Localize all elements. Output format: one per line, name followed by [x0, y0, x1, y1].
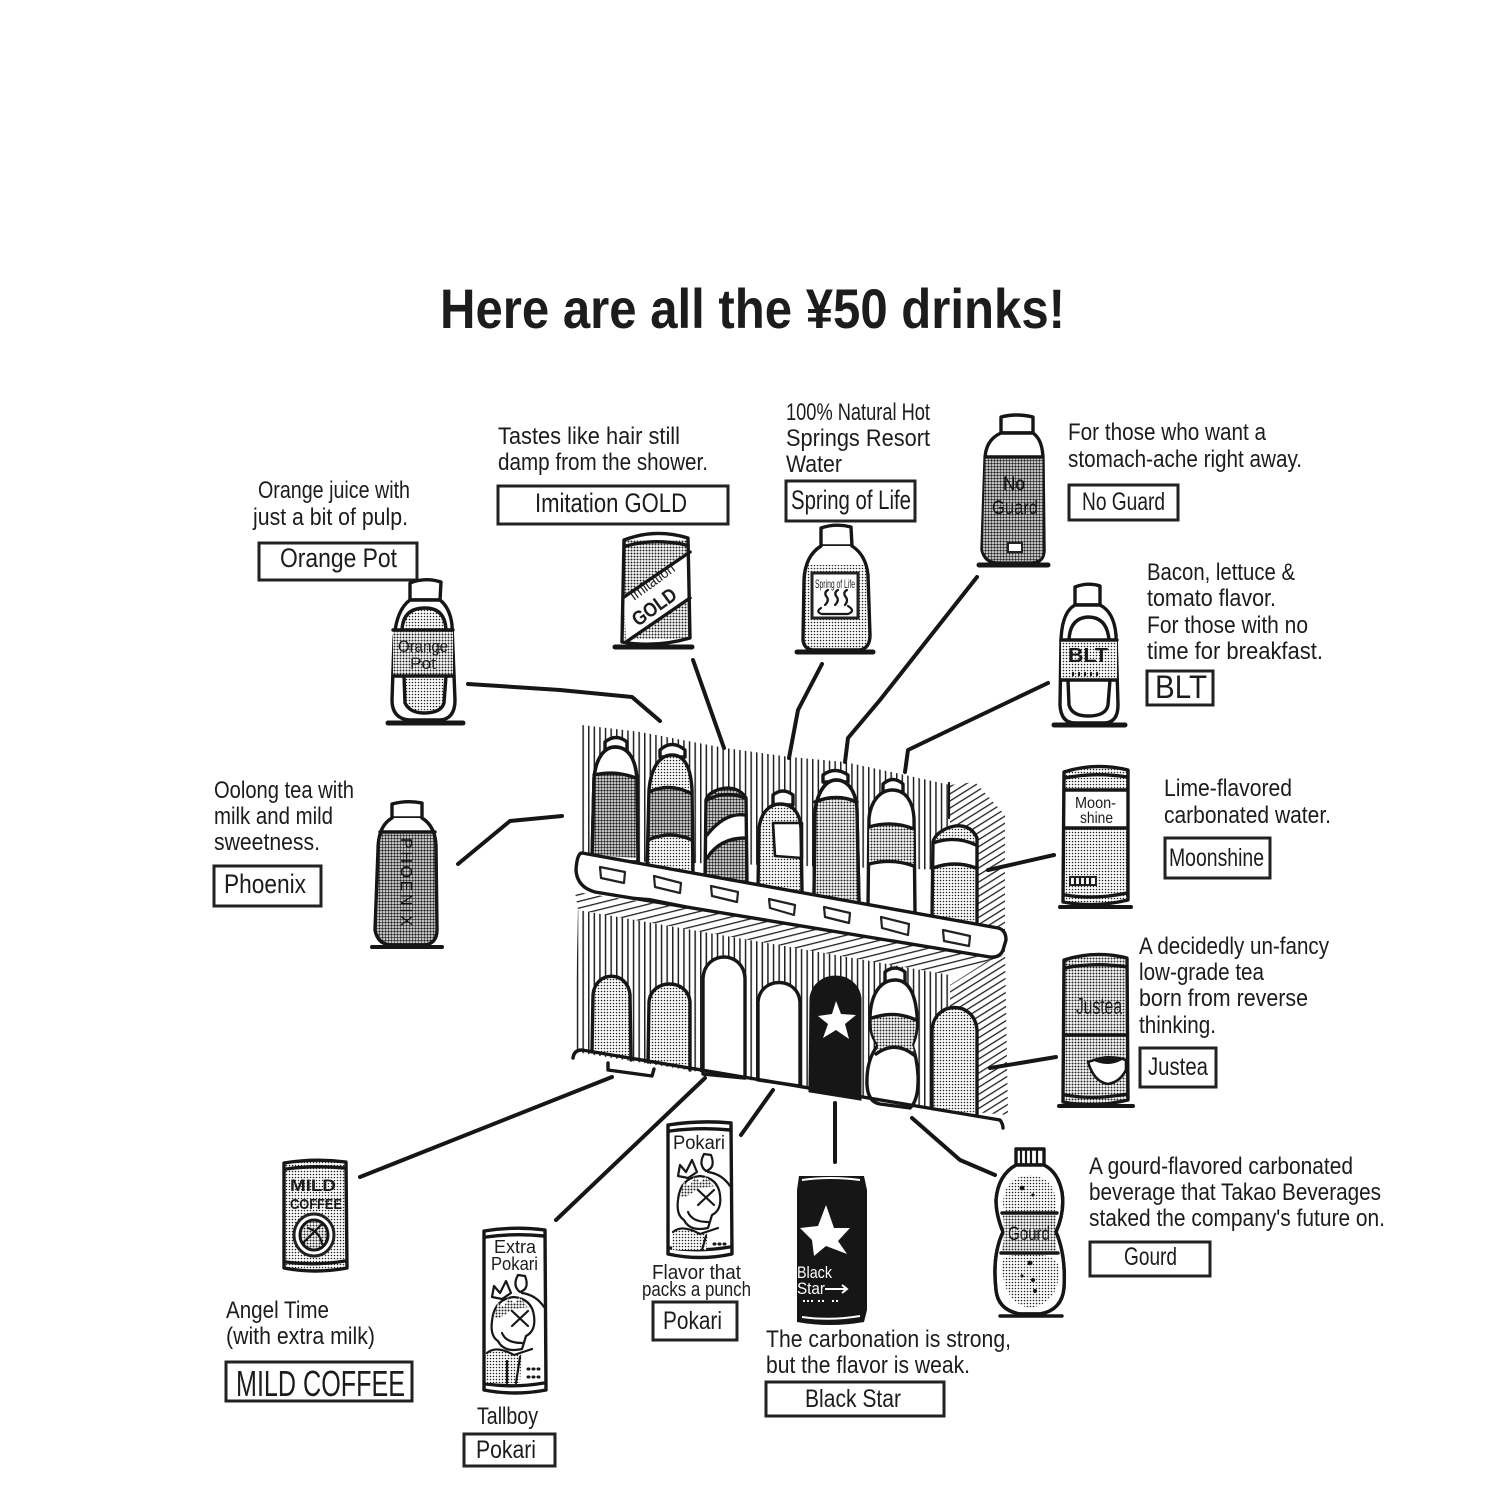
icon: spring of life bottle: Spring of Life [815, 577, 855, 591]
name box: Moonshine [1169, 844, 1264, 872]
name box: BLT [1155, 669, 1207, 705]
arrow [360, 1077, 612, 1177]
icon: gourd bottle: Gourd [1008, 1224, 1050, 1245]
caption [252, 477, 410, 531]
icon: black star can: Star [797, 1279, 825, 1298]
panel: Pokari [642, 1090, 773, 1340]
name box: Imitation GOLD [535, 488, 687, 518]
icon: moonshine can [1060, 766, 1131, 907]
name box [1090, 1242, 1210, 1276]
icon: mild coffee can: MILD [290, 1176, 336, 1195]
caption: Bacon, lettuce & [1147, 559, 1295, 586]
caption [642, 1262, 751, 1301]
lower bottle 3 [703, 957, 745, 1078]
caption: Lime-flavored [1164, 775, 1292, 802]
icon: moonshine can: shine [1080, 810, 1113, 827]
lower bottle 5: black can with star [810, 977, 860, 1099]
lower bottle 2 [648, 984, 690, 1070]
icon: phoenix bottle [372, 802, 442, 947]
icon: moonshine can: Moon- [1075, 795, 1116, 812]
upper bottle 2 [647, 744, 693, 876]
caption: sweetness. [214, 829, 320, 856]
caption [214, 777, 354, 856]
arrow [990, 1057, 1056, 1068]
icon: imitation gold can: Imitation [626, 560, 678, 604]
icon: extra pokari can [484, 1228, 546, 1393]
panel: Black Star [766, 1103, 1011, 1416]
upper bottle 5 [814, 770, 859, 903]
lower bottle 6: gourd [867, 968, 918, 1108]
icon: mild coffee can: COFFEE [290, 1196, 342, 1213]
caption: For those with no [1147, 612, 1308, 639]
icon: imitation gold can: GOLD [628, 584, 681, 631]
illustration: vending machine shelves [573, 725, 1008, 1128]
name box [1069, 485, 1178, 520]
shelf front edge [573, 1050, 1003, 1128]
icon: black star can: Black [797, 1263, 832, 1282]
name box [1140, 1048, 1216, 1087]
icon: orange pot bottle: Orange [398, 637, 448, 656]
panel: Tallboy Pokari [464, 1078, 705, 1466]
caption: just a bit of pulp. [252, 504, 408, 531]
right side hatching [950, 782, 1005, 930]
name box: Justea [1148, 1053, 1208, 1081]
caption: 100% Natural Hot [786, 399, 930, 426]
caption: low-grade tea [1139, 959, 1265, 986]
name box: Pokari [663, 1307, 722, 1335]
lower bottle 4 [758, 982, 800, 1086]
icon: BLT bottle [1054, 584, 1125, 725]
caption: staked the company's future on. [1089, 1205, 1385, 1232]
panel: Moonshine [988, 766, 1331, 907]
name box [1165, 838, 1270, 878]
name box [226, 1362, 412, 1404]
icon: no guard bottle: No [1003, 474, 1025, 495]
lower bottle 1 [592, 976, 631, 1060]
panel: No Guard [845, 415, 1302, 762]
panel: Gourd [912, 1118, 1385, 1316]
name box [498, 486, 728, 524]
arrow [458, 816, 562, 864]
caption: carbonated water. [1164, 802, 1331, 829]
tag bracket [608, 1063, 654, 1076]
icon: orange pot bottle [388, 580, 463, 723]
upper bottle 4 [758, 791, 802, 892]
name box: Black Star [805, 1385, 901, 1413]
caption: (with extra milk) [226, 1323, 375, 1350]
name box [259, 543, 417, 580]
icon: extra pokari can: Pokari [491, 1254, 538, 1274]
caption [766, 1326, 1011, 1379]
arrow [693, 660, 724, 748]
icon: black star can [797, 1176, 867, 1325]
panel: BLT [905, 559, 1323, 772]
caption [498, 423, 708, 476]
caption: Water [786, 451, 842, 478]
caption: For those who want a [1068, 419, 1267, 446]
arrow [556, 1078, 705, 1220]
arrow [912, 1118, 995, 1175]
caption [1139, 933, 1329, 1039]
name box: Phoenix [224, 869, 306, 899]
panel: Spring of Life [786, 399, 930, 758]
shelf ledge [576, 853, 1006, 957]
upper bottle 3 [705, 788, 747, 884]
name box [653, 1302, 737, 1340]
icon: gourd bottle [995, 1149, 1064, 1316]
icon: no guard bottle [979, 415, 1048, 565]
icon: justea can: Justea [1076, 993, 1122, 1019]
icon: no guard bottle: Guard [992, 498, 1038, 519]
arrow [468, 684, 660, 721]
caption: Tallboy [477, 1403, 538, 1430]
caption: Springs Resort [786, 425, 930, 452]
name box: Orange Pot [280, 543, 397, 573]
caption: A decidedly un-fancy [1139, 933, 1329, 960]
icon: mild coffee can [284, 1160, 347, 1271]
caption: Angel Time [226, 1297, 329, 1324]
arrow [789, 664, 822, 758]
icon: orange pot bottle: Pot [410, 654, 436, 673]
caption: milk and mild [214, 803, 333, 830]
icon: extra pokari can: Extra [494, 1237, 537, 1257]
upper wall hatching [582, 725, 950, 870]
name box: No Guard [1082, 488, 1165, 516]
caption [786, 399, 930, 478]
arrow [905, 683, 1048, 772]
caption [1068, 419, 1302, 473]
caption: Flavor that [652, 1262, 741, 1284]
caption: thinking. [1139, 1012, 1216, 1039]
name box: Pokari [476, 1436, 536, 1464]
name box: Gourd [1124, 1243, 1177, 1271]
caption: packs a punch [642, 1279, 751, 1301]
icon: pokari can: Pokari [673, 1133, 725, 1154]
icon: phoenix bottle: PHOENIX [397, 838, 414, 926]
title: Here are all the ¥50 drinks! [440, 277, 1065, 340]
panel: Imitation GOLD [498, 423, 728, 748]
caption: but the flavor is weak. [766, 1352, 970, 1379]
lower bottle 7 [932, 1008, 977, 1115]
icon: justea can [1059, 954, 1133, 1106]
upper bottle 6 [868, 780, 915, 913]
caption [1147, 559, 1323, 665]
caption: beverage that Takao Beverages [1089, 1179, 1381, 1206]
panel: Mild Coffee [226, 1077, 612, 1404]
caption [1089, 1153, 1385, 1232]
panel: Orange Pot [252, 477, 660, 723]
shelf underside hatching [575, 892, 1005, 975]
caption: born from reverse [1139, 985, 1308, 1012]
panel: Phoenix [214, 777, 562, 947]
caption: A gourd-flavored carbonated [1089, 1153, 1353, 1180]
caption: Tastes like hair still [498, 423, 680, 450]
caption: The carbonation is strong, [766, 1326, 1011, 1353]
shelf price tags [600, 867, 970, 946]
arrow [833, 1103, 837, 1162]
arrow [845, 577, 977, 762]
caption: Oolong tea with [214, 777, 354, 804]
caption: stomach-ache right away. [1068, 446, 1302, 473]
icon: imitation gold can [615, 533, 692, 647]
upper bottle 1 [592, 738, 638, 862]
name box [766, 1382, 944, 1416]
arrow [988, 855, 1054, 870]
name box [464, 1434, 555, 1466]
lower wall hatching [575, 908, 950, 1112]
icon: pokari can [668, 1122, 732, 1258]
caption: time for breakfast. [1147, 638, 1323, 665]
name box [786, 481, 915, 521]
icon: spring of life bottle [797, 525, 873, 652]
arrow [741, 1090, 773, 1135]
caption: tomato flavor. [1147, 585, 1276, 612]
caption [1164, 775, 1331, 829]
upper bottle 7 [932, 783, 977, 922]
panel: Justea [990, 933, 1329, 1106]
caption: damp from the shower. [498, 449, 708, 476]
icon: BLT bottle: BLT [1068, 645, 1108, 667]
name box: Spring of Life [791, 485, 911, 515]
name box: MILD COFFEE [236, 1363, 405, 1404]
caption [226, 1297, 375, 1350]
name box [214, 866, 321, 906]
caption: Orange juice with [258, 477, 410, 504]
